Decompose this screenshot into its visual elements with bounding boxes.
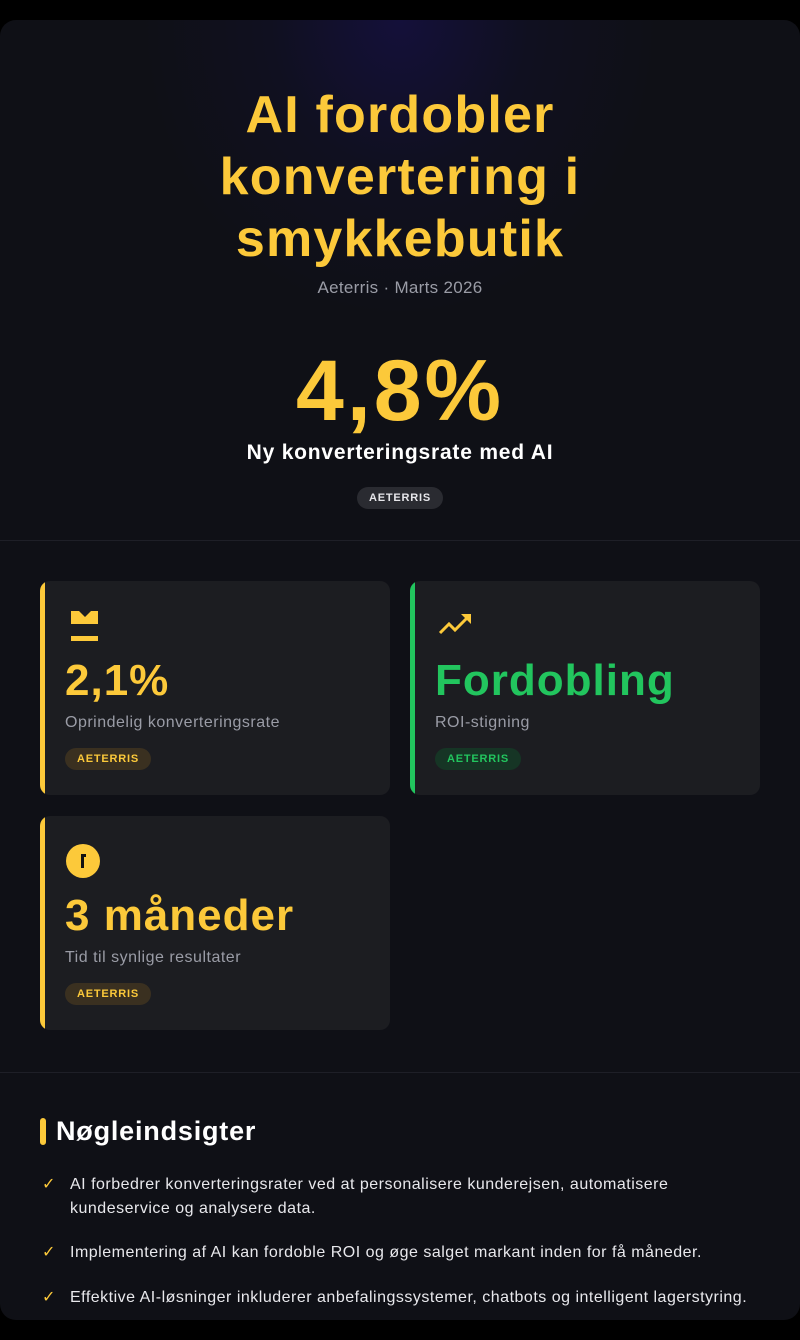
hero stat: 4,8% xyxy=(296,343,504,439)
card: original conversion rate xyxy=(40,581,390,795)
card: original conversion rate: Oprindelig konverteringsrate xyxy=(65,714,280,731)
title xyxy=(220,86,580,268)
card: time to results xyxy=(40,816,390,1030)
insights list: AI forbedrer konverteringsrater ved at personalisere kunderejsen, automatisere kundeservice og analysere data. xyxy=(70,1176,668,1217)
card: ROI xyxy=(410,581,760,795)
card: original conversion rate: 2,1% xyxy=(65,656,169,705)
section heading: Nøgleindsigter xyxy=(56,1116,256,1146)
card: time to results: AETERRIS xyxy=(77,988,139,1000)
card: time to results: Tid til synlige resultater xyxy=(65,949,241,966)
title: konvertering i xyxy=(220,148,580,206)
insights list: ✓ xyxy=(42,1176,55,1193)
insights list: Effektive AI-løsninger inkluderer anbefalingssystemer, chatbots og intelligent lagerstyring. xyxy=(70,1289,747,1306)
hero stat label: Ny konverteringsrate med AI xyxy=(247,441,553,464)
icon: clock xyxy=(66,844,100,878)
card: ROI: Fordobling xyxy=(435,656,675,705)
title: smykkebutik xyxy=(236,210,564,268)
subtitle: Aeterris · Marts 2026 xyxy=(317,278,483,297)
icon: trending up xyxy=(439,614,471,634)
title: AI fordobler xyxy=(245,86,555,144)
insights list: Implementering af AI kan fordoble ROI og øge salget markant inden for få måneder. xyxy=(70,1244,702,1261)
card: original conversion rate: AETERRIS xyxy=(77,753,139,765)
icon: crown xyxy=(71,611,98,641)
hero badge: AETERRIS xyxy=(369,492,431,504)
card: ROI: AETERRIS xyxy=(447,753,509,765)
insights list: ✓ xyxy=(42,1244,55,1261)
card: ROI: ROI-stigning xyxy=(435,714,530,731)
card: time to results: 3 måneder xyxy=(65,891,294,940)
insights list: ✓ xyxy=(42,1289,55,1306)
insights list xyxy=(42,1176,747,1306)
